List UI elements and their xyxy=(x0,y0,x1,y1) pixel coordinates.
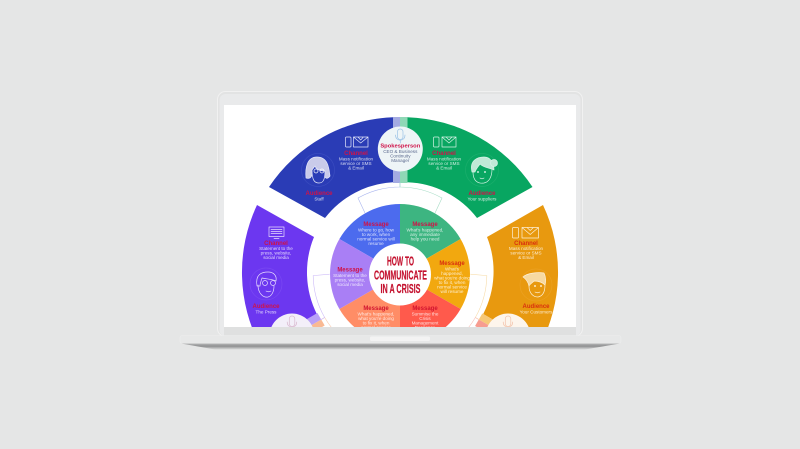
heading: channel: Channel xyxy=(344,151,368,157)
text: channel detail: press, website, xyxy=(261,250,291,256)
heading: channel: Channel xyxy=(264,241,288,247)
text: channel detail: Mass notification xyxy=(339,156,374,162)
wedge: customers message xyxy=(400,239,470,309)
text: spokesperson detail: CEO & Business xyxy=(383,149,418,154)
text: message detail: normal service xyxy=(437,284,467,290)
heading: audience: Audience xyxy=(305,191,333,197)
top bracket xyxy=(358,182,442,213)
icon: supplier avatar xyxy=(466,154,498,186)
text: message detail: Statement to the xyxy=(333,273,367,278)
left connector strips xyxy=(306,313,325,327)
text: message detail: to fix it, when xyxy=(363,320,390,326)
text: message detail: help you need xyxy=(411,236,440,242)
icon: press avatar xyxy=(250,268,282,300)
title disc xyxy=(369,244,431,306)
wedge: press message xyxy=(330,239,400,309)
text: channel detail: service or SMS xyxy=(340,161,372,166)
heading: message: Message xyxy=(412,306,438,312)
heading: message: Message xyxy=(412,222,438,228)
laptop base xyxy=(180,327,621,350)
text: message detail: social media xyxy=(337,282,363,287)
text: message detail: Crisis xyxy=(419,316,431,321)
panel: press segment xyxy=(242,205,316,327)
text: audience detail: Staff xyxy=(314,196,324,202)
text: message detail: what you're doing xyxy=(434,276,470,280)
text: channel detail: service or SMS xyxy=(428,161,460,166)
icon: monitor xyxy=(269,227,284,238)
text: message detail: press, website, xyxy=(335,278,365,282)
text: message detail: Summise the xyxy=(412,312,439,316)
heading: audience: Audience xyxy=(468,191,496,197)
heading: channel: Channel xyxy=(514,241,538,247)
icon: phone and envelope xyxy=(346,137,368,147)
text: message detail: happened, xyxy=(441,271,463,276)
heading: message: Message xyxy=(363,306,389,312)
panel: suppliers segment xyxy=(408,117,532,218)
text: channel detail: service or SMS xyxy=(510,250,542,256)
title: IN A CRISIS xyxy=(380,281,421,296)
spokesperson disc: top xyxy=(378,126,423,172)
text: spokesperson detail: Manager xyxy=(391,158,410,163)
right bracket xyxy=(468,274,488,327)
icon: phone and envelope xyxy=(512,228,538,238)
wedge: staff message xyxy=(339,204,400,274)
wedge: crisis response message xyxy=(400,274,461,344)
icon: microphone xyxy=(503,316,513,327)
heading: audience: Audience xyxy=(522,304,550,310)
text: message detail: normal service will xyxy=(357,236,395,242)
top connector strips xyxy=(393,117,408,183)
spokesperson disc: right xyxy=(486,314,530,358)
text: channel detail: & Email xyxy=(518,255,534,260)
text: channel detail: social media xyxy=(263,255,289,260)
text: message detail: Management xyxy=(412,320,439,326)
wedge: suppliers message xyxy=(400,204,461,274)
text: channel detail: & Email xyxy=(348,166,364,170)
title: COMMUNICATE xyxy=(374,268,427,282)
icon: microphone xyxy=(287,316,297,327)
spokesperson disc: left xyxy=(271,314,312,327)
text: message detail: normal service xyxy=(361,325,391,330)
text: message detail: Response xyxy=(415,325,436,330)
left bracket xyxy=(312,274,332,327)
heading: message: Message xyxy=(337,268,363,274)
text: message detail: any immediate xyxy=(410,232,440,237)
panel: staff segment xyxy=(269,117,393,218)
text: message detail: What's happened, xyxy=(358,312,394,316)
heading: audience: Audience xyxy=(252,304,280,310)
text: message detail: Where to go, how xyxy=(358,228,395,232)
icon: customer avatar xyxy=(520,269,552,301)
text: audience detail: The Press xyxy=(256,310,277,314)
text: message detail: what you're doing xyxy=(358,316,394,321)
heading: message: Message xyxy=(363,222,389,228)
right connector strips xyxy=(475,314,493,327)
text: audience detail: Your suppliers xyxy=(468,196,497,202)
laptop lid xyxy=(218,92,582,336)
heading: channel: Channel xyxy=(432,151,456,157)
text: message detail: to fix it, when xyxy=(439,280,466,285)
laptop screen xyxy=(224,105,576,327)
text: message detail: resume xyxy=(368,241,384,246)
text: channel detail: & Email xyxy=(436,166,452,170)
title xyxy=(374,254,427,296)
heading: message: Message xyxy=(439,261,465,267)
text: audience detail: Your Customers xyxy=(520,310,553,314)
icon: staff avatar xyxy=(302,154,334,186)
text: message detail: will resume xyxy=(441,289,464,294)
text: channel detail: Statement to the xyxy=(259,246,293,251)
text: message detail: What's xyxy=(445,266,460,272)
panel: message wheel xyxy=(330,204,470,344)
text: channel detail: Mass notification xyxy=(427,156,462,162)
icon: phone and envelope xyxy=(434,137,456,147)
icon: microphone xyxy=(396,129,405,143)
title: HOW TO xyxy=(387,254,414,268)
wedge: what happened message xyxy=(339,274,400,344)
heading: spokesperson: Spokesperson xyxy=(380,144,421,150)
text: channel detail: Mass notification xyxy=(509,246,544,251)
text: message detail: to work, when xyxy=(362,232,391,237)
infographic xyxy=(242,117,558,327)
text: message detail: What's happened, xyxy=(407,228,443,232)
panel: customers segment xyxy=(483,205,558,327)
text: spokesperson detail: Continuity xyxy=(390,154,411,158)
